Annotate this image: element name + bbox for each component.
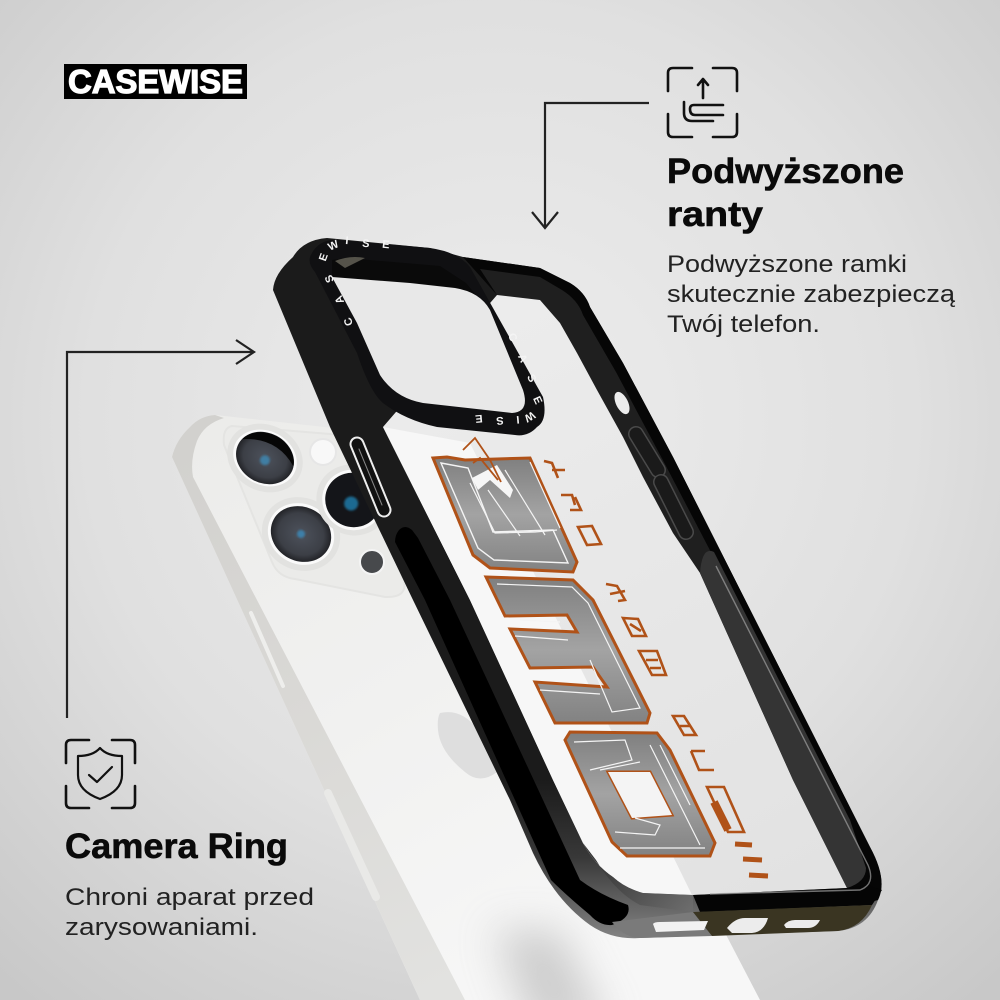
print notch: [472, 465, 513, 498]
lidar sensor: [360, 550, 384, 574]
print notch lines: [463, 438, 501, 482]
ring lettering bottom: E: [530, 395, 544, 406]
text: raised edges description: skutecznie zabezpieczą: [667, 281, 956, 308]
ring lettering bottom: I: [516, 413, 520, 425]
ring lettering top: E: [317, 252, 331, 263]
case bottom band right: [693, 905, 872, 936]
ring hole: [332, 277, 525, 413]
flash: [310, 439, 336, 465]
black bottom rail: [693, 885, 882, 912]
ring lettering bottom: C: [505, 331, 519, 344]
port speaker: [653, 921, 708, 932]
case silhouette: [273, 238, 882, 938]
ring lettering top: A: [333, 294, 347, 306]
print letter two: [486, 577, 650, 723]
ring lettering bottom: A: [515, 352, 529, 365]
case bottom band left: [612, 912, 712, 938]
apple logo: [438, 712, 497, 778]
lens top: [215, 411, 315, 505]
print letter three: [565, 732, 715, 856]
arrow: left: [67, 340, 254, 718]
volume button upper: [636, 434, 658, 470]
ring inner wall: [332, 258, 480, 300]
side button upper: [251, 613, 283, 686]
text: camera ring description: zarysowaniami.: [65, 914, 258, 941]
right rail inner shade: [480, 269, 714, 573]
right dark band: [700, 551, 866, 888]
volume button lower: [661, 482, 686, 532]
volume button upper face: [636, 434, 658, 470]
grey inner strip: [583, 843, 693, 912]
ring lettering top: I: [345, 235, 349, 247]
side button lower: [328, 793, 376, 897]
transparent phone case: [273, 235, 882, 938]
ring lettering top: E: [382, 239, 390, 251]
logo: CASEWISE: [68, 63, 243, 100]
rail highlight: [710, 566, 871, 894]
camera ring: [310, 235, 545, 435]
port charging: [727, 918, 768, 933]
ring lettering bottom: E: [475, 412, 483, 424]
port microphone: [784, 920, 820, 928]
phone shade streak: [495, 930, 610, 1000]
icon: raised edges: [668, 68, 737, 137]
lens right: [304, 452, 402, 548]
text: camera ring description: [65, 884, 314, 941]
heading: camera ring: Camera Ring: [65, 827, 288, 866]
print letter one: [433, 438, 577, 572]
ring lettering top: [317, 235, 390, 328]
phone side frame: [172, 415, 465, 1000]
ring lettering bottom: [475, 331, 544, 426]
lens bottom: [249, 483, 353, 585]
arrow: top: [532, 103, 649, 228]
heading: raised edges: Podwyższone: [667, 152, 904, 191]
camera module: [215, 411, 405, 597]
phone seen through the panel: [383, 427, 692, 895]
text: raised edges description: Twój telefon.: [667, 311, 820, 338]
ring lettering bottom: S: [524, 373, 538, 384]
ring lettering top: S: [323, 273, 337, 284]
text: raised edges description: Podwyższone ramki: [667, 251, 907, 278]
ring lettering top: W: [326, 238, 341, 254]
heading: raised edges: [667, 152, 904, 234]
volume button lower face: [661, 482, 686, 532]
ring lettering bottom: W: [521, 408, 537, 424]
icon: shield: [66, 740, 135, 808]
case print graphic: [433, 438, 768, 876]
side slot: [611, 390, 633, 416]
side pill button: [357, 444, 384, 510]
text: camera ring description: Chroni aparat przed: [65, 884, 314, 911]
text: raised edges description: [667, 251, 956, 338]
clear back panel: [383, 295, 847, 895]
ring lettering top: C: [342, 316, 356, 328]
ring lettering top: S: [362, 238, 370, 250]
right rail: [463, 257, 882, 905]
ring wall reflection: [335, 257, 365, 268]
black left rail stripe: [395, 527, 629, 925]
ring lettering bottom: S: [496, 414, 504, 426]
small print glyphs: [544, 461, 768, 876]
phone body: [172, 415, 760, 1000]
heading: raised edges: ranty: [667, 195, 764, 234]
